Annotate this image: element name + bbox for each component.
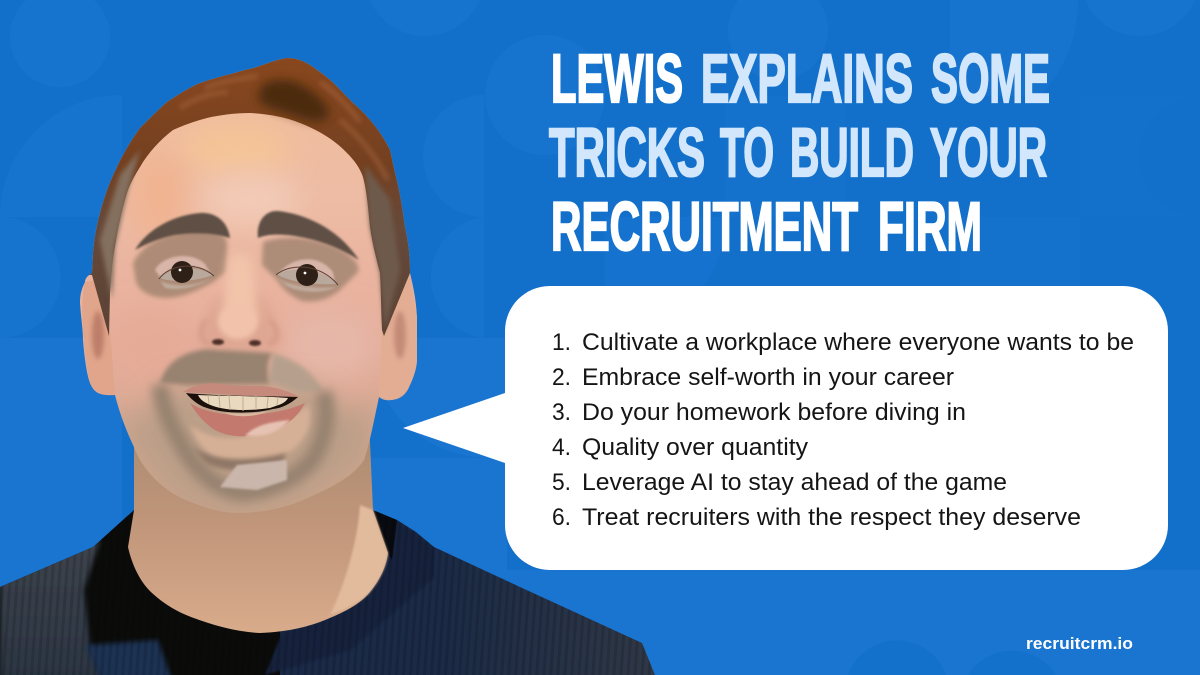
title line 2: YOUR: [930, 114, 1047, 191]
chin white patch: [220, 460, 287, 490]
item 3: 3.: [552, 399, 571, 426]
left side hair lighter: [100, 150, 140, 300]
title: [549, 40, 1050, 265]
upper lip: [183, 383, 300, 397]
forehead left tone: [129, 155, 190, 232]
under-eye left: [160, 280, 208, 290]
nose wings: [200, 322, 278, 342]
ear left: [82, 280, 115, 395]
eye left: [159, 261, 214, 283]
chin dark band: [193, 447, 287, 470]
title line 2: BUILD: [790, 114, 914, 191]
item 3: Do your homework before diving in: [582, 399, 966, 426]
hair highlights: [180, 76, 388, 180]
right side hair: [365, 165, 400, 330]
skin: [80, 58, 417, 504]
eyelid left: [155, 256, 211, 277]
list of six tricks: [552, 329, 1134, 531]
ear left inner: [92, 311, 104, 359]
nostril right: [249, 340, 261, 346]
forehead centre light: [200, 172, 300, 228]
ear right: [379, 273, 417, 400]
speech bubble: [403, 286, 1168, 570]
dark crown of hair: [258, 80, 329, 121]
title line 2: TO: [720, 114, 774, 191]
item 1: 1.: [552, 329, 571, 356]
eyebrow right: [258, 211, 359, 260]
neck: [128, 420, 388, 633]
title line 1: EXPLAINS: [701, 40, 913, 117]
brand url: recruitcrm.io: [1026, 634, 1133, 653]
under-eye right: [280, 280, 335, 292]
ear right inner: [394, 311, 406, 359]
nostril left: [212, 339, 224, 345]
title line 3: RECRUITMENT: [551, 188, 858, 265]
item 2: Embrace self-worth in your career: [582, 364, 954, 391]
title line 1: [551, 40, 1050, 117]
item 5: 5.: [552, 469, 571, 496]
mouth opening: [186, 393, 298, 413]
gum line: [225, 411, 268, 416]
stubble ring: [160, 385, 326, 493]
nose highlight: [222, 253, 258, 320]
eye right: [276, 264, 338, 286]
hair: [89, 58, 410, 336]
nose side shading: [204, 301, 277, 348]
nose tip: [217, 312, 258, 340]
title line 2: [549, 114, 1047, 191]
eye socket left: [133, 230, 227, 298]
eye socket right: [262, 238, 358, 302]
lower lip: [190, 403, 305, 436]
eyelid right: [279, 259, 335, 283]
item 5: Leverage AI to stay ahead of the game: [582, 469, 1007, 496]
item 4: Quality over quantity: [582, 434, 809, 461]
neck highlight: [330, 505, 388, 615]
item 6: 6.: [552, 504, 571, 531]
moustache light side: [268, 353, 323, 392]
title line 1: SOME: [931, 40, 1050, 117]
title line 3: FIRM: [878, 188, 982, 265]
teeth: [198, 395, 288, 410]
title line 2: TRICKS: [549, 114, 705, 191]
tooth gaps: [208, 395, 278, 411]
title line 1: LEWIS: [551, 40, 683, 117]
item 6: Treat recruiters with the respect they deserve: [582, 504, 1081, 531]
eyebrow left: [135, 213, 230, 250]
portrait of Lewis: [0, 50, 660, 675]
lip highlight: [245, 420, 290, 436]
moustache: [160, 349, 273, 385]
head and ears: [70, 50, 430, 520]
area below lip: [190, 405, 310, 462]
item 2: 2.: [552, 364, 571, 391]
cheek right: [293, 321, 366, 378]
sweater: [0, 500, 660, 675]
forehead highlight: [202, 140, 268, 164]
item 4: 4.: [552, 434, 571, 461]
item 1: Cultivate a workplace where everyone wants to be: [582, 329, 1134, 356]
lower face tone: [112, 385, 382, 518]
cheek left: [110, 310, 190, 380]
